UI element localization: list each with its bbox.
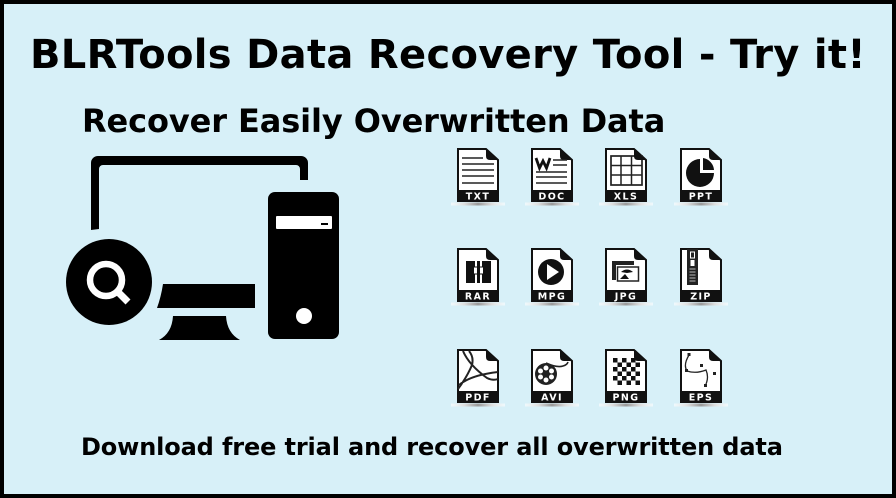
icon: DOC file (525, 149, 579, 206)
icon: DOC file: DOC (538, 192, 566, 202)
icon: RAR file (451, 249, 505, 306)
footer call to action: Download free trial and recover all overwritten data (81, 433, 783, 461)
icon: PPT file (674, 149, 728, 206)
icon: XLS file (599, 149, 653, 206)
icon: MPG file: MPG (538, 292, 566, 302)
icon: PDF file (451, 350, 505, 406)
icon: MPG file (525, 249, 579, 306)
icon: computer with magnifier (66, 156, 339, 340)
icon: EPS file (674, 350, 728, 406)
icon: JPG file (599, 249, 653, 306)
icon: TXT file (451, 149, 505, 206)
icon: TXT file: TXT (466, 192, 490, 202)
icon: RAR file: RAR (465, 292, 491, 302)
subtitle: Recover Easily Overwritten Data (82, 102, 665, 140)
icon: AVI file: AVI (541, 392, 563, 404)
icon: PDF file: PDF (465, 392, 491, 404)
icon: EPS file: EPS (689, 392, 713, 404)
icon: PPT file: PPT (689, 192, 713, 202)
icon: JPG file: JPG (614, 292, 637, 302)
icon: PNG file: PNG (613, 392, 639, 404)
icon: ZIP file: ZIP (690, 292, 712, 302)
icon: ZIP file (674, 249, 728, 306)
icon: XLS file: XLS (614, 192, 638, 202)
icon: AVI file (525, 350, 579, 406)
icon: PNG file (599, 350, 653, 406)
title: BLRTools Data Recovery Tool - Try it! (30, 32, 866, 78)
